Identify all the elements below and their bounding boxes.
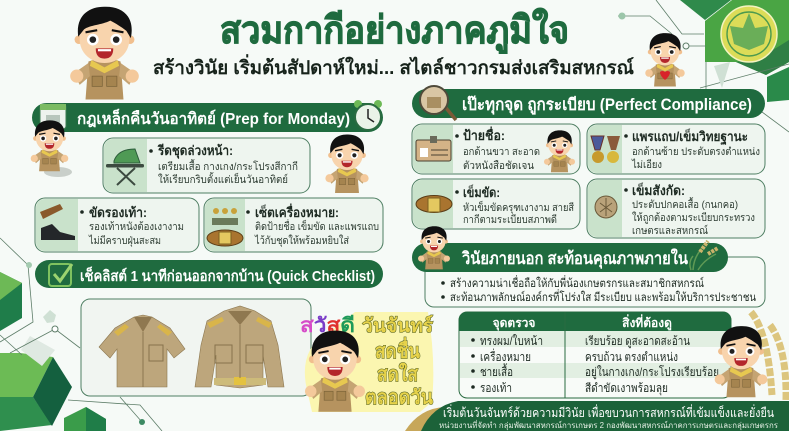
banner: Quick Checklist [35,260,383,288]
banner: discipline: วินัยภายนอก สะท้อนคุณภาพภายใน [462,248,688,269]
uniform: short sleeve shirt [99,315,185,387]
character: on name tag card [544,130,575,172]
icon: pins and belt [207,208,243,246]
panel: uniforms [81,299,311,396]
panel: discipline bullets [425,257,765,307]
table: checklist: เครื่องหมาย [480,348,531,364]
table: checklist: เรียบร้อย ดูสะอาดสะอ้าน [585,334,690,349]
table: checklist: อยู่ในกางเกง/กระโปรงเรียบร้อย [585,365,719,380]
seal [721,6,777,62]
card: ribbons [587,124,765,174]
card: insignia: เซ็ตเครื่องหมาย: [255,203,339,220]
table: checklist: ทรงผม/ใบหน้า [480,334,543,348]
icon: iron board [106,149,144,185]
footer: หน่วยงานที่จัดทำ กลุ่มพัฒนาสหกรณ์การเกษตร 2 กองพัฒนาสหกรณ์ภาคการเกษตรและกลุ่มเกษตรกร [439,419,779,430]
card: collar pin: ประดับปกคอเสื้อ (กนกคอ) [632,197,738,211]
banner: Prep for Monday: กฎเหล็กคืนวันอาทิตย์ (Prep for Monday) [77,107,350,128]
card: belt: หัวเข็มขัดครุฑเงางาม สายสี [463,200,575,214]
icon: pin [595,196,617,218]
card: belt: เข็มขัด: [463,183,500,200]
card: ribbons: แพรแถบ/เข็มวิทยฐานะ [632,127,748,146]
table: checklist: รองเท้า [480,381,512,395]
card: belt [412,179,580,229]
card: insignia [204,198,383,252]
greeting sticker: ตลอดวัน [365,387,433,409]
card: ribbons: ไม่เอียง [631,158,662,171]
subtitle: สร้างวินัย เริ่มต้นสัปดาห์ใหม่... สไตล์ชาวกรมส่งเสริมสหกรณ์ [153,54,634,79]
card: shoes: ไม่มีคราบฝุ่นสะสม [88,234,161,247]
character: heart [645,33,685,86]
greeting sticker: สดใส [377,362,419,386]
character: wink [325,135,369,193]
card: collar pin: เกษตรและสหกรณ์ [632,224,708,237]
icon: name tag [416,136,451,161]
decoration: bottom-left cubes [0,238,162,431]
footer [405,401,789,431]
card: collar pin [587,179,765,238]
decoration: rice field [751,312,786,400]
card: iron: ให้เรียบกริบตั้งแต่เย็นวันอาทิตย์ [158,172,288,186]
icon: magnifier [420,86,456,120]
character: cheering [305,331,365,412]
title: สวมกากีอย่างภาคภูมิใจ [220,8,569,54]
table: checklist: สิ่งที่ต้องดู [622,314,672,331]
card: name tag: อกด้านขวา สะอาด [463,146,540,158]
banner: Prep for Monday [32,100,383,132]
icon: rice [690,241,718,270]
icon: belt [416,196,452,212]
card: collar pin: เข็มสังกัด: [632,181,685,198]
banner: Perfect Compliance [412,86,765,120]
banner: Perfect Compliance: เป๊ะทุกจุด ถูกระเบียบ (Perfect Compliance) [462,95,752,116]
panel: discipline bullets: สร้างความน่าเชื่อถือให้กับพี่น้องเกษตรกรและสมาชิกสหกรณ์ [450,275,704,290]
icon: calendar [40,104,66,129]
greeting sticker [300,312,434,412]
table: checklist [459,312,731,398]
icon: clock [354,100,382,130]
greeting sticker: สดชื่น [375,336,420,363]
character: on discipline banner [418,226,450,269]
card: shoes: รองเท้าหนังต้องเงางาม [89,221,184,233]
table: checklist: ชายเสื้อ [480,363,513,379]
icon: checkbox [49,264,72,286]
table: checklist: ครบถ้วน ตรงตำแหน่ง [585,350,678,364]
card: insignia: ติดป้ายชื่อ เข็มขัด และแพรแถบ [255,219,379,233]
card: shoes [35,198,199,252]
card: name tag: ป้ายชื่อ: [463,126,505,143]
uniform: long sleeve jacket [195,306,284,388]
icon: medals [591,136,620,163]
card: collar pin: ให้ถูกต้องตามระเบียบกระทรวง [632,211,755,224]
banner: Quick Checklist: เช็คลิสต์ 1 นาทีก่อนออกจากบ้าน (Quick Checklist) [80,266,375,285]
banner: discipline [412,241,728,272]
card: belt: กากีตามระเบียบสภาพดี [463,213,557,226]
greeting sticker: วันจันทร์ [362,315,434,337]
card: insignia: ไว้กับชุดให้พร้อมหยิบใส่ [254,234,350,247]
card: name tag: ตัวหนังสือชัดเจน [463,159,534,172]
card: iron [103,138,310,193]
card: shoes: ขัดรองเท้า: [89,205,147,220]
card: name tag [412,124,580,174]
card: iron: เตรียมเสื้อ กางเกง/กระโปรงสีกากี [158,159,298,173]
decoration: top-right hexagons and seal [618,0,789,132]
table: checklist: จุดตรวจ [493,316,535,331]
card: ribbons: อกด้านซ้าย ประดับตรงตำแหน่ง [632,146,760,158]
character: thumbs up [70,7,139,99]
icon: shoe and brush [40,204,75,240]
greeting word: sawasdee: สวัสดี [300,314,355,337]
character: beside table [715,326,767,397]
character: pointing [31,120,72,177]
card: iron: รีดชุดล่วงหน้า: [157,143,233,159]
table: checklist: สีดำขัดเงาพร้อมลุย [585,381,668,396]
